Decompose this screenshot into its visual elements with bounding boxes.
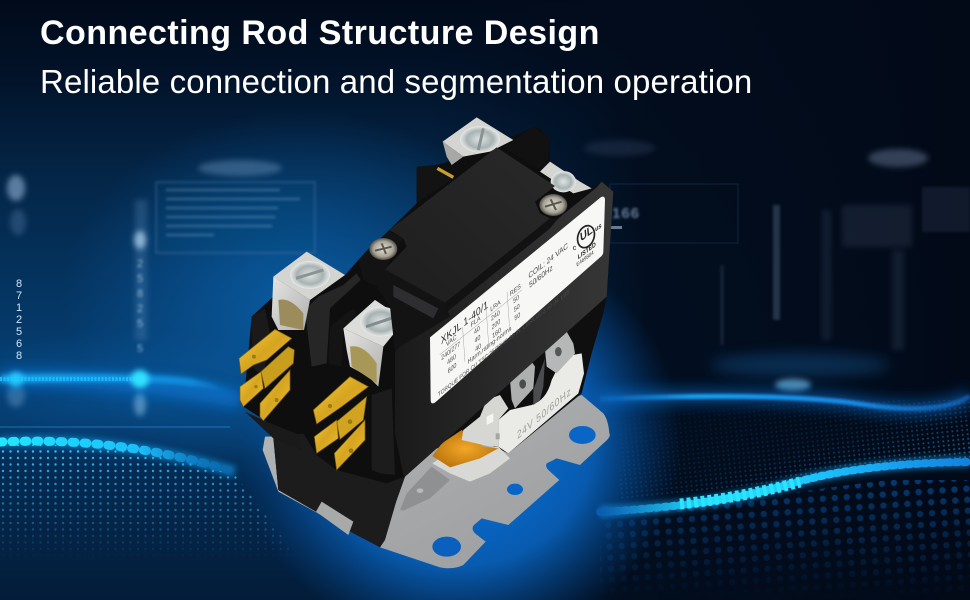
blurred light columns, left [7,175,147,416]
white terminal holder [462,353,584,453]
label text: 200 [491,318,501,332]
digit column, left: 8 [16,350,22,362]
blurred interface panels, right: 166 [612,205,640,222]
digit column, left: 6 [16,338,22,350]
blurred digit column [137,258,143,355]
base plate [263,395,610,568]
digit column, left: 2 [16,314,22,326]
label text: 50 [514,311,521,323]
particle wave, lower left [0,432,289,550]
label text: VAC [446,333,457,349]
gold quick connect tabs, left pole [239,329,294,421]
cover screws [369,194,567,260]
gold quick connect tabs, front pole [313,377,368,470]
label text: 240/277 [441,340,461,362]
UL listed mark: c [573,243,577,252]
light streak, left [0,370,240,427]
black side face [395,182,613,477]
spade terminals on holder [510,332,575,408]
contactor product [239,117,613,568]
label text: 600 [448,362,457,376]
label text: RES [510,283,521,298]
UL listed mark [573,222,602,269]
label text: 240 [491,309,500,323]
white rating label [430,197,605,403]
UL listed mark: LISTED [577,241,596,261]
label text: Harm.rating-norms [468,324,512,366]
label text: LRA [490,298,501,314]
dark inner body behind terminal holder [433,297,607,453]
digit column, left: 7 [16,290,22,302]
UL listed mark: us [595,222,602,234]
solid black silhouette of contactor [243,127,613,547]
label text: 160 [492,326,501,340]
blurred digit column: 5 [137,343,143,355]
digit column, left [16,278,22,362]
copper coil [432,430,498,467]
label text: XKJL 1-40/1 [441,298,489,347]
blurred digit column: 8 [137,288,143,300]
blurred interface panel, upper centre [156,160,315,253]
holder marking: 24V 50/60Hz [517,385,572,442]
label text: 40 [474,325,480,337]
rear terminals [417,117,592,203]
blurred digit column: 5 [137,318,143,330]
label text: FLA [471,314,481,329]
rear left terminal [272,252,345,330]
label text: 50 [514,303,520,314]
title: Connecting Rod Structure Design [40,14,600,52]
label text [434,235,571,399]
front terminal [343,300,405,387]
grey clip [316,502,353,535]
blurred digit column: 5 [137,273,143,285]
digit column, left: 5 [16,326,22,338]
label text: 40 [474,334,481,345]
label text: 50 [513,294,520,306]
blurred digit column: 2 [137,303,143,315]
label text: 50/60Hz [529,263,553,290]
blurred interface panels, right [584,140,970,350]
left pole body highlights [245,273,361,450]
particle wave, lower right [600,400,970,600]
subtitle: Reliable connection and segmentation operation [40,63,752,100]
label text: 40 [475,342,482,354]
UL listed mark: E469804 [576,250,594,269]
digit column, left: 1 [16,302,22,314]
digit column, left: 8 [16,278,22,290]
label text: TORQUE FOR CU TSC:35/30/45-20 IN. LBS/LUG3 40 IN. LBS [438,289,570,399]
black top cover [358,147,558,352]
label text: 480 [447,353,456,367]
lower black housing [273,433,405,547]
black side rib [372,388,395,475]
label text: COIL: 24 VAC [528,241,568,281]
blurred digit column: 2 [137,258,143,270]
light streak, right [600,353,970,408]
metal bracket and bobbin [400,447,510,511]
UL listed mark: UL [580,224,593,245]
